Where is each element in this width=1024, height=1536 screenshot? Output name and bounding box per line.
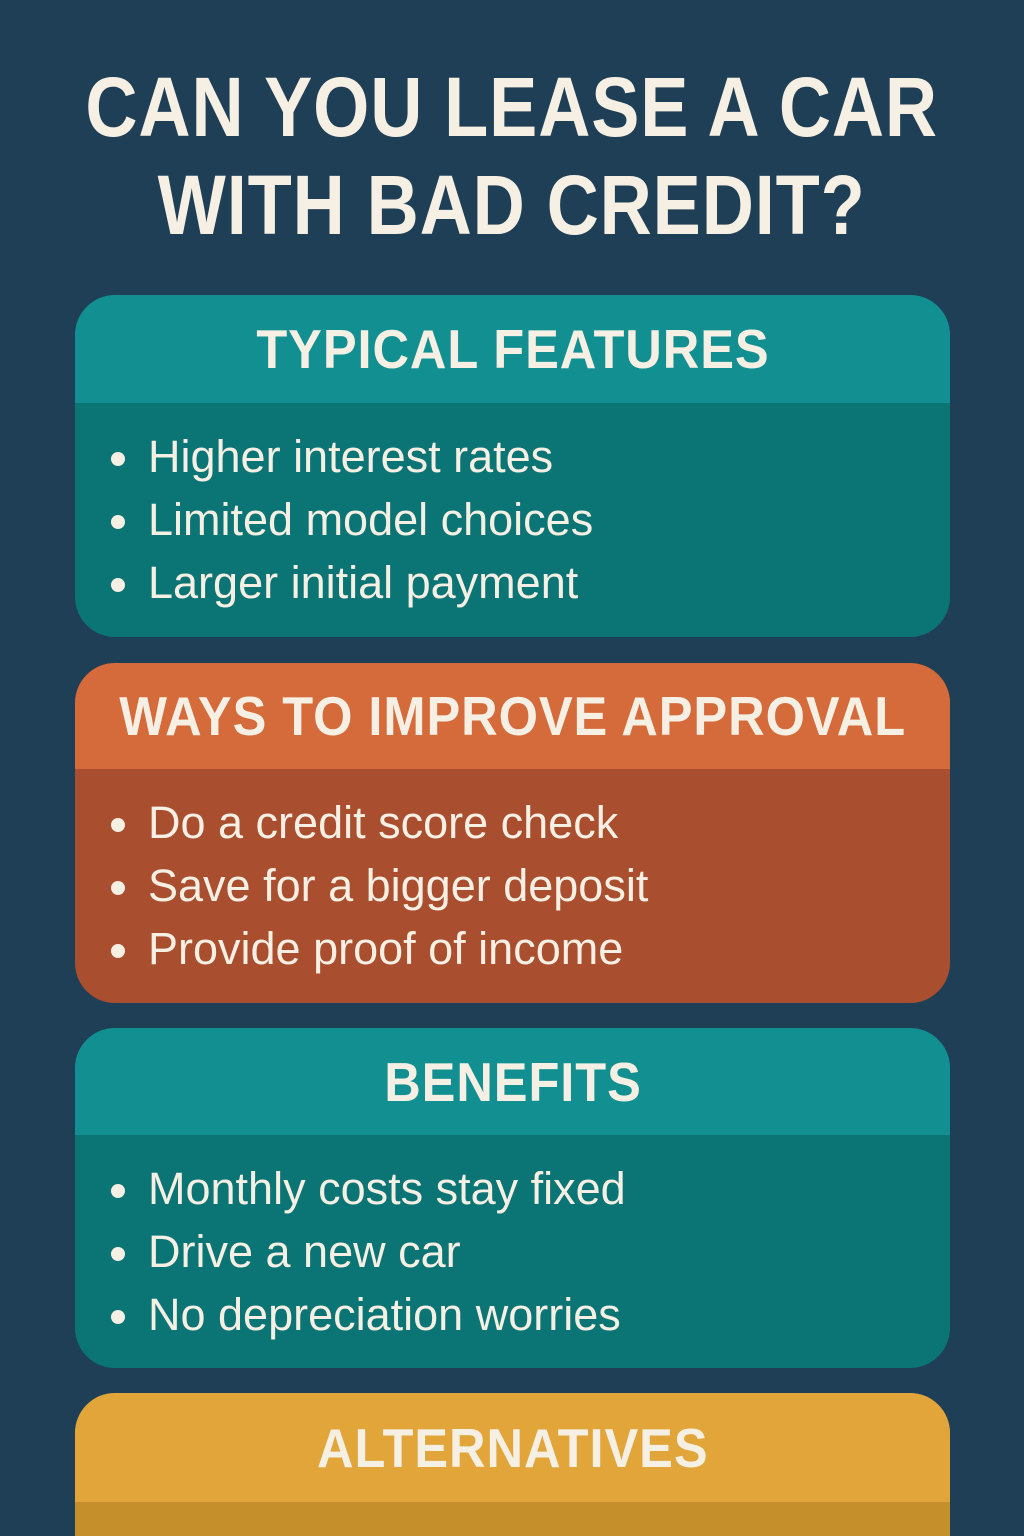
list: improvements: Do a credit score check bbox=[148, 797, 618, 848]
heading: alternatives bbox=[75, 1393, 950, 1502]
list: features: Larger initial payment bbox=[148, 557, 578, 608]
list: benefits: No depreciation worries bbox=[148, 1289, 621, 1340]
heading: typical features: TYPICAL FEATURES bbox=[256, 318, 769, 380]
list: features: Limited model choices bbox=[148, 494, 593, 545]
list: improvements: Provide proof of income bbox=[148, 923, 623, 974]
heading: benefits: BENEFITS bbox=[384, 1050, 641, 1112]
list: benefits bbox=[111, 1163, 626, 1340]
title: WITH BAD CREDIT? bbox=[158, 158, 866, 252]
list: features: Higher interest rates bbox=[148, 431, 553, 482]
heading: benefits bbox=[75, 1028, 950, 1135]
list: benefits: Drive a new car bbox=[148, 1226, 461, 1277]
heading: typical features bbox=[75, 295, 950, 403]
title: CAN YOU LEASE A CAR bbox=[86, 60, 938, 154]
panel: typical features bbox=[75, 295, 950, 637]
panel: benefits bbox=[75, 1028, 950, 1368]
panel: ways to improve approval bbox=[75, 663, 950, 1003]
list: features bbox=[111, 431, 593, 608]
list: benefits: Monthly costs stay fixed bbox=[148, 1163, 626, 1214]
heading: ways to improve: WAYS TO IMPROVE APPROVAL bbox=[119, 685, 906, 747]
heading: alternatives: ALTERNATIVES bbox=[317, 1416, 708, 1478]
panel: alternatives bbox=[75, 1393, 950, 1536]
list: improvements bbox=[111, 797, 648, 974]
title bbox=[86, 60, 938, 252]
list: improvements: Save for a bigger deposit bbox=[148, 860, 648, 911]
heading: ways to improve bbox=[75, 663, 950, 769]
